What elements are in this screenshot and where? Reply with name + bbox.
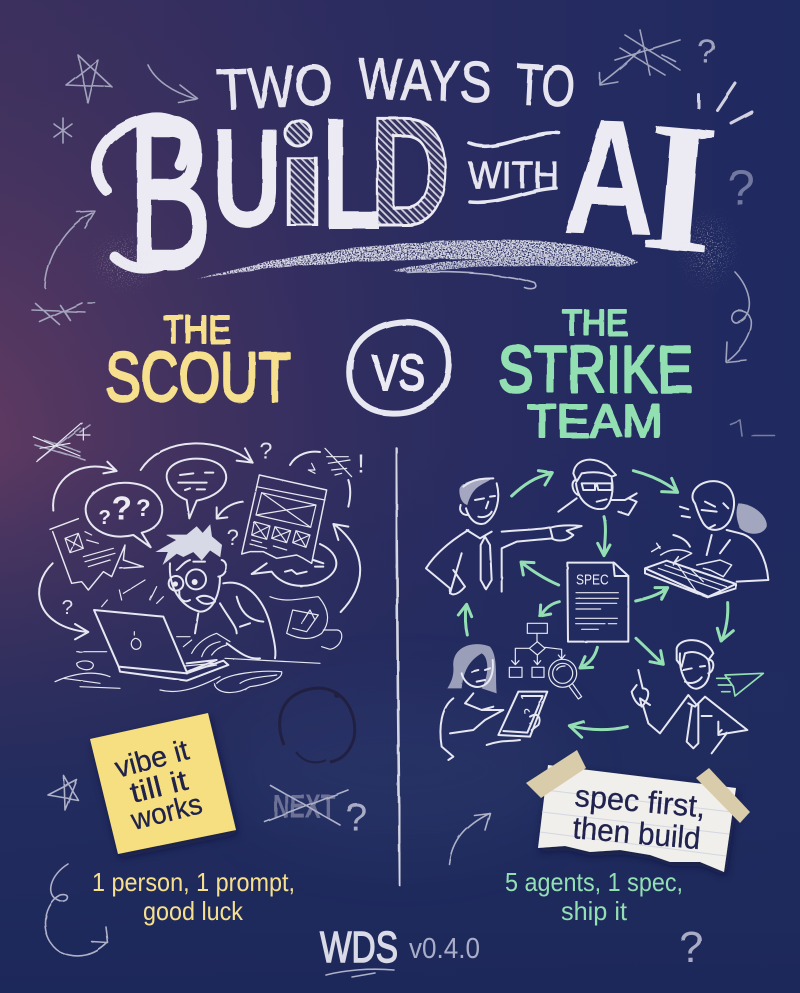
title underline	[197, 240, 638, 289]
scout caption: good luck	[143, 896, 244, 926]
doodle asterisk	[54, 118, 72, 143]
curly arrow bottom left	[45, 864, 108, 956]
paper plane	[717, 673, 763, 696]
right torn speech bubble	[252, 544, 336, 586]
logo underline	[326, 969, 394, 977]
left torn document	[50, 519, 143, 590]
scattered question marks: ?	[227, 525, 239, 550]
crossed out doodle	[32, 303, 95, 325]
word: the: THE	[163, 309, 231, 352]
desk lines	[77, 580, 320, 663]
version number: v0.4.0	[409, 933, 480, 965]
bubble marks: ?	[136, 495, 151, 522]
word: team: TEAM	[527, 395, 663, 447]
title line: two ways to: TWO	[215, 52, 335, 123]
agent: pointing man	[426, 477, 582, 594]
title word: ai: A	[561, 83, 659, 271]
bottom scribbles	[45, 776, 703, 972]
word: scout: SCOUT	[105, 338, 291, 416]
person face and hair	[157, 525, 226, 612]
note text	[571, 778, 707, 856]
title word: build	[96, 72, 450, 315]
strike team caption: 5 agents, 1 spec,	[505, 867, 683, 897]
scribble speech bubble	[167, 459, 226, 518]
scattered question marks	[62, 437, 365, 619]
laptop	[94, 610, 228, 681]
scattered question marks: !	[357, 449, 365, 479]
agent: typing woman	[645, 481, 768, 597]
agent: glasses man	[558, 460, 637, 515]
curly arrow right	[726, 272, 751, 362]
agent: tablet woman	[440, 644, 547, 760]
green workflow arrows	[458, 471, 733, 737]
crossed star top right	[615, 30, 680, 75]
note text: then build	[571, 810, 702, 856]
margin note scribble	[308, 448, 352, 477]
strike team illustration	[426, 460, 768, 760]
title word: build: U	[212, 99, 282, 256]
doodle question top right: ?	[697, 33, 716, 71]
scout heading	[105, 309, 291, 416]
bubble marks: ?	[112, 490, 132, 527]
doodle arrow top right	[600, 50, 640, 85]
title word: ai	[561, 82, 725, 294]
scattered question marks: ?	[259, 437, 272, 463]
version mark	[320, 923, 480, 977]
word: strike: STRIKE	[498, 332, 693, 406]
doodle arrow rising left	[45, 211, 95, 288]
coffee cup doodle	[270, 597, 342, 649]
doodle question bottom right: ?	[679, 923, 703, 972]
doodle arrow top left	[148, 65, 198, 102]
vs badge	[349, 322, 449, 413]
person torso	[195, 583, 275, 659]
doodle star bottom left	[48, 776, 78, 810]
doodle star top left	[66, 55, 112, 103]
title word: build: B	[128, 72, 212, 315]
wds logo: WDS	[320, 923, 398, 972]
center divider line	[396, 448, 400, 885]
title word: ai: I	[635, 82, 725, 294]
title word: with	[468, 133, 559, 202]
chaos arrows	[39, 443, 360, 639]
agent: thumbs up man	[632, 640, 747, 753]
note text: spec first,	[573, 778, 707, 824]
crossed scribble	[33, 423, 90, 462]
title word: build: L	[322, 84, 382, 263]
question mark speech bubble	[86, 483, 162, 547]
yellow sticky note	[90, 713, 236, 854]
strike team heading	[498, 302, 693, 447]
sticky note text: works	[127, 788, 206, 837]
coffee ring stain	[280, 688, 355, 762]
bubble marks	[98, 490, 151, 529]
scout caption	[92, 867, 295, 926]
sticky note text	[112, 734, 206, 837]
spec label: SPEC	[576, 573, 609, 589]
paper tape	[526, 750, 586, 798]
burst ticks by ai	[699, 83, 752, 123]
strike team caption: ship it	[561, 896, 628, 926]
title line: two ways to: TO	[514, 52, 577, 120]
scattered question marks: ?	[62, 596, 73, 619]
spec document	[567, 563, 628, 642]
sticky note text: vibe it	[112, 734, 192, 785]
flowchart and magnifier	[509, 623, 582, 699]
doodle scribble right	[730, 420, 775, 436]
title line: two ways to: WAYS	[357, 46, 493, 115]
title line: two ways to	[215, 46, 577, 123]
crossed out next: NEXT	[273, 788, 335, 826]
vs label: VS	[372, 345, 425, 401]
bubble marks: ?	[98, 506, 111, 529]
chalk dust	[101, 222, 726, 280]
title word: with: WITH	[468, 155, 559, 197]
word: the: THE	[562, 302, 628, 343]
scout illustration	[33, 423, 365, 693]
title	[96, 46, 726, 315]
scribbles: top and margins	[32, 30, 775, 460]
scout caption: 1 person, 1 prompt,	[92, 867, 295, 897]
wireframe browser window	[242, 475, 327, 563]
person hands	[177, 633, 230, 657]
doodle arrow rising	[449, 813, 490, 864]
torn paper note	[526, 750, 750, 872]
doodle question right: ?	[727, 160, 755, 216]
title word: build: D	[370, 85, 450, 258]
doodle question bottom center: ?	[345, 796, 367, 839]
spilled scribbles	[55, 661, 282, 693]
crossed doodle left	[35, 425, 90, 460]
title word: build: I	[276, 137, 329, 246]
strike team caption	[505, 867, 683, 926]
sticky note text: till it	[127, 765, 191, 810]
